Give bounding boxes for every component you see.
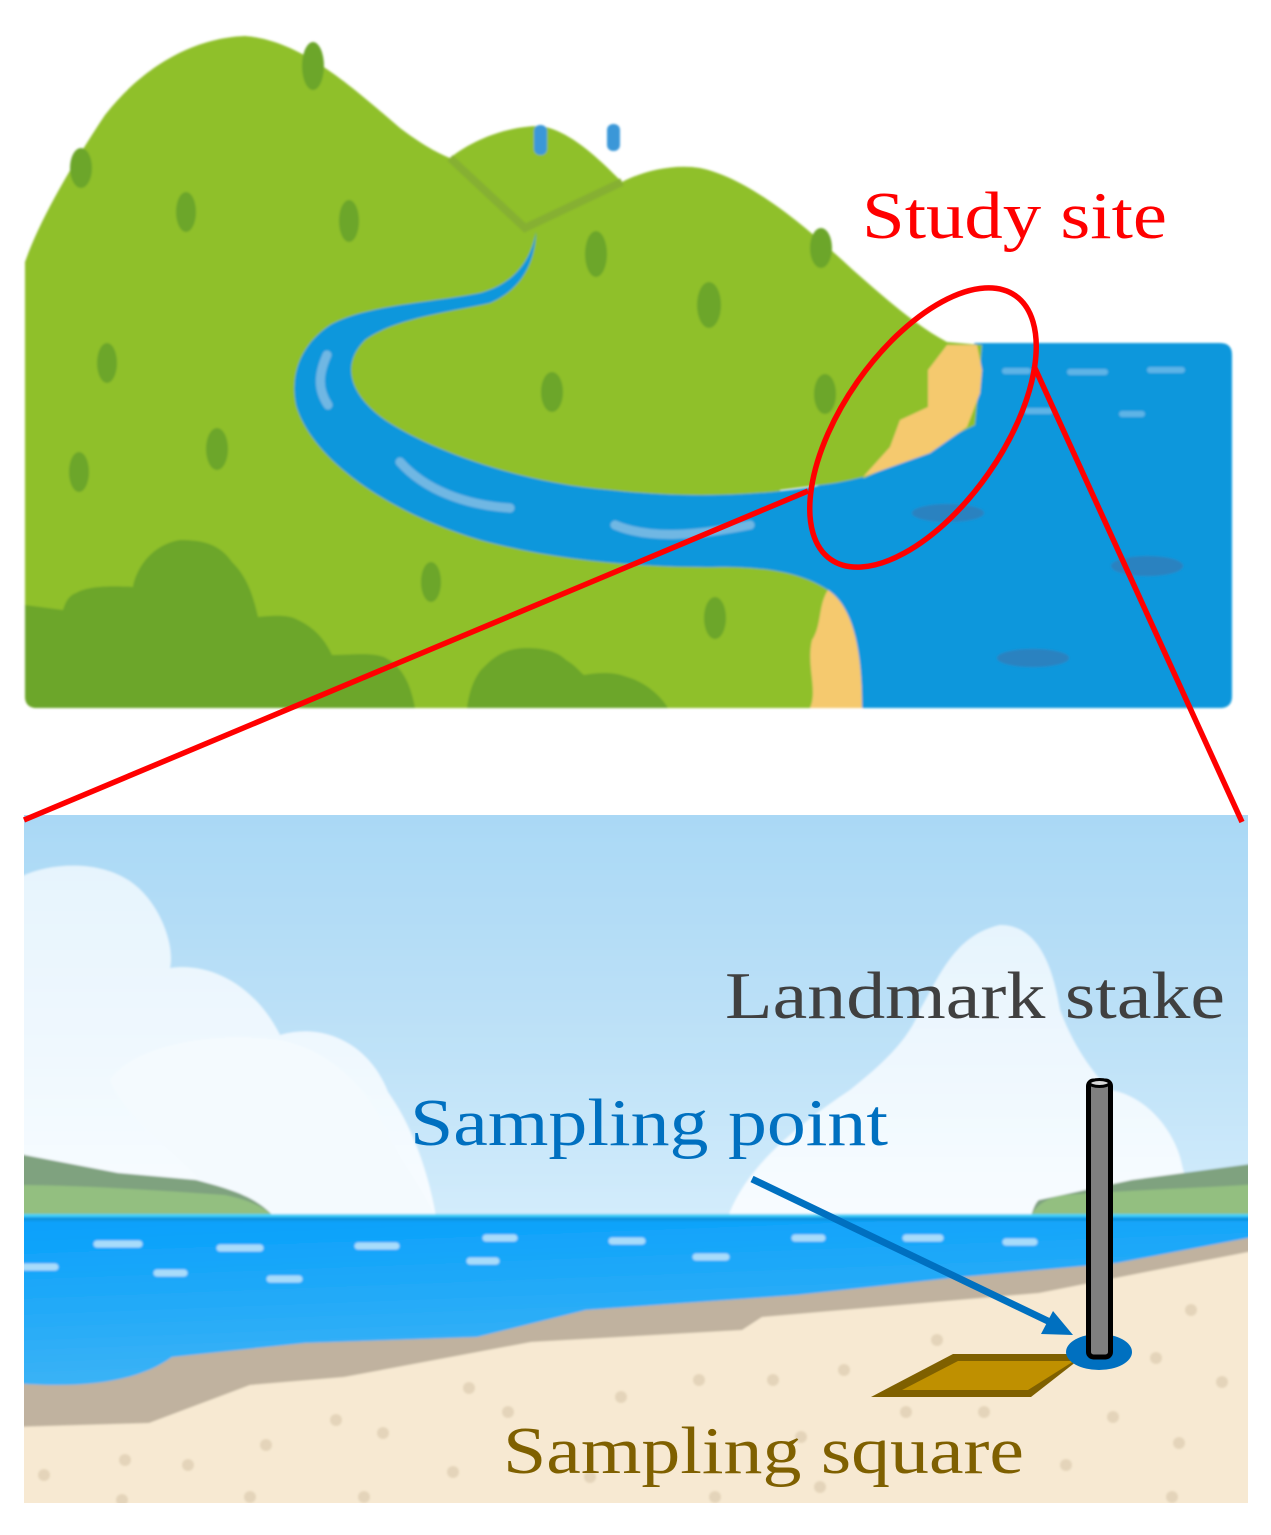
sea xyxy=(780,343,1232,708)
sky xyxy=(14,805,1258,1220)
dry sand xyxy=(14,1250,1258,1513)
rain marks xyxy=(534,124,620,155)
sea ripples xyxy=(24,1238,1034,1279)
sampling point xyxy=(1066,1334,1132,1370)
sea xyxy=(24,1219,1248,1386)
label: landmark stake: Landmark stake xyxy=(725,959,1225,1033)
label: sampling square: Sampling square xyxy=(503,1414,1024,1488)
label: study site: Study site xyxy=(862,179,1167,253)
sampling square xyxy=(871,1354,1086,1397)
river xyxy=(294,232,880,590)
panel: river map xyxy=(25,36,1232,708)
forest bushes xyxy=(25,540,415,708)
panel: beach scene xyxy=(14,805,1258,1513)
left clouds xyxy=(14,866,436,1217)
beach lower xyxy=(810,590,862,708)
label: sampling point: Sampling point xyxy=(410,1086,888,1160)
dam ridge xyxy=(450,158,622,228)
horizon band xyxy=(14,1214,1258,1217)
arrow: sampling point xyxy=(752,1179,1073,1335)
right clouds xyxy=(728,925,1195,1217)
trees xyxy=(69,42,836,639)
hills far left xyxy=(14,1153,274,1217)
sand specks xyxy=(38,1304,1228,1506)
fish shadows xyxy=(912,504,1183,667)
landmark stake xyxy=(1088,1080,1110,1357)
hills far right xyxy=(1031,1163,1258,1217)
wet sand xyxy=(24,1236,1248,1428)
hills land xyxy=(25,36,982,708)
sea ripples xyxy=(1005,370,1182,414)
river highlights xyxy=(320,355,750,534)
beach upper xyxy=(863,345,982,477)
study site ellipse and zoom lines xyxy=(24,250,1242,822)
